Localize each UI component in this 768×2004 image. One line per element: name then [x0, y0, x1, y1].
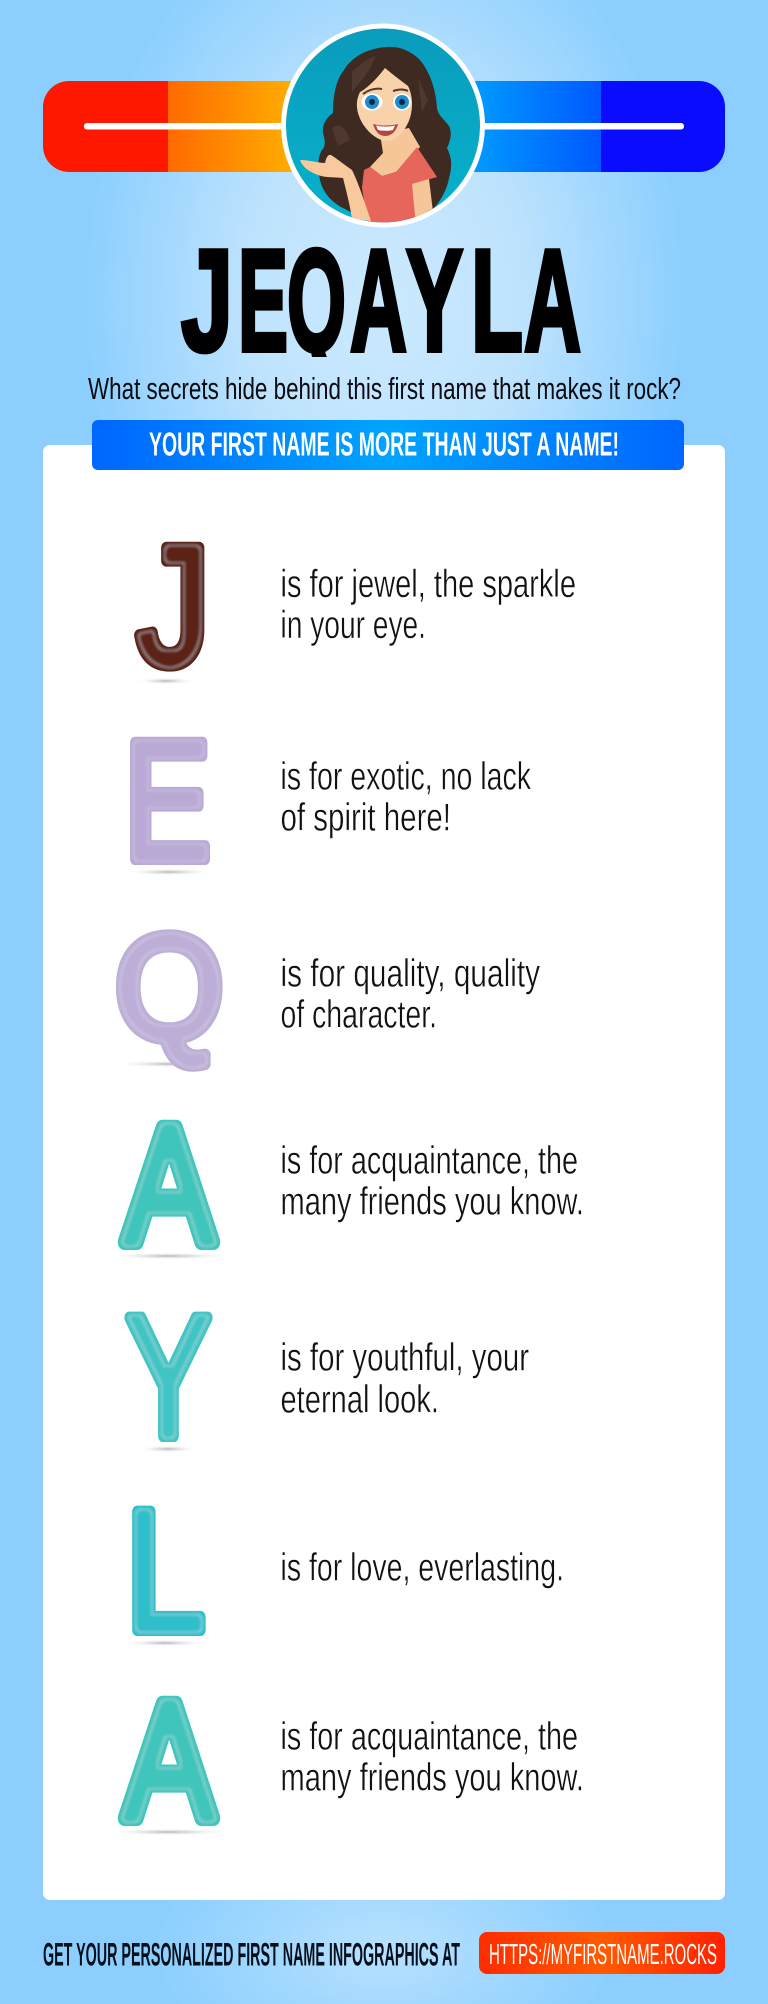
- face: [357, 68, 412, 141]
- row: letter A: is for acquaintance, the: [280, 1140, 578, 1182]
- row: letter L: [121, 1475, 564, 1667]
- shirt: [362, 147, 437, 225]
- white content panel: [43, 445, 725, 1900]
- row: letter J: J: [137, 511, 210, 700]
- row: letter Q: Q: [115, 906, 224, 1070]
- eyes: [362, 94, 382, 110]
- row: letter Y: Y: [126, 1281, 211, 1473]
- row: letter E: of spirit here!: [280, 796, 451, 840]
- row: letter A (second): is for acquaintance, the: [280, 1716, 578, 1758]
- title: E: [238, 220, 288, 382]
- title: Y: [406, 220, 463, 382]
- neck and chest: [370, 128, 420, 176]
- row: letter Q: [115, 906, 540, 1070]
- row: letter E: E: [124, 706, 211, 895]
- row: letter Y: is for youthful, your: [280, 1336, 529, 1380]
- row: letter A: many friends you know.: [280, 1180, 584, 1224]
- row: letter A: A: [124, 1093, 214, 1278]
- row: letter J: in your eye.: [280, 604, 426, 647]
- row: letter L: is for love, everlasting.: [280, 1546, 564, 1590]
- row: letter Q: is for quality, quality: [280, 952, 540, 996]
- title: J: [181, 220, 233, 382]
- row: letter A: [105, 1093, 584, 1278]
- row: letter E: is for exotic, no lack: [280, 756, 531, 798]
- mouth: [373, 124, 398, 136]
- row: letter A (second): [105, 1669, 584, 1854]
- row: letter A (second): A: [124, 1669, 214, 1854]
- avatar: woman in circle: [281, 24, 485, 228]
- right arm: [412, 179, 433, 217]
- row: letter J: [136, 511, 576, 700]
- row: letter Y: [126, 1281, 529, 1473]
- header color bar: [43, 81, 725, 172]
- row: letter A (second): many friends you know.: [280, 1756, 584, 1800]
- hair: [318, 47, 451, 220]
- left arm and hand: [300, 155, 371, 221]
- row: letter L: L: [125, 1475, 205, 1667]
- title: L: [471, 220, 523, 382]
- row: letter E: [124, 706, 531, 895]
- banner: [92, 420, 684, 470]
- title: A: [350, 220, 407, 382]
- row: letter J: is for jewel, the sparkle: [280, 563, 576, 606]
- eyebrows: [363, 89, 408, 94]
- title: [180, 246, 581, 357]
- title: Q: [287, 220, 346, 382]
- title: A: [524, 220, 581, 382]
- footer url button: [479, 1932, 725, 1974]
- row: letter Q: of character.: [280, 994, 437, 1036]
- row: letter Y: eternal look.: [280, 1378, 439, 1422]
